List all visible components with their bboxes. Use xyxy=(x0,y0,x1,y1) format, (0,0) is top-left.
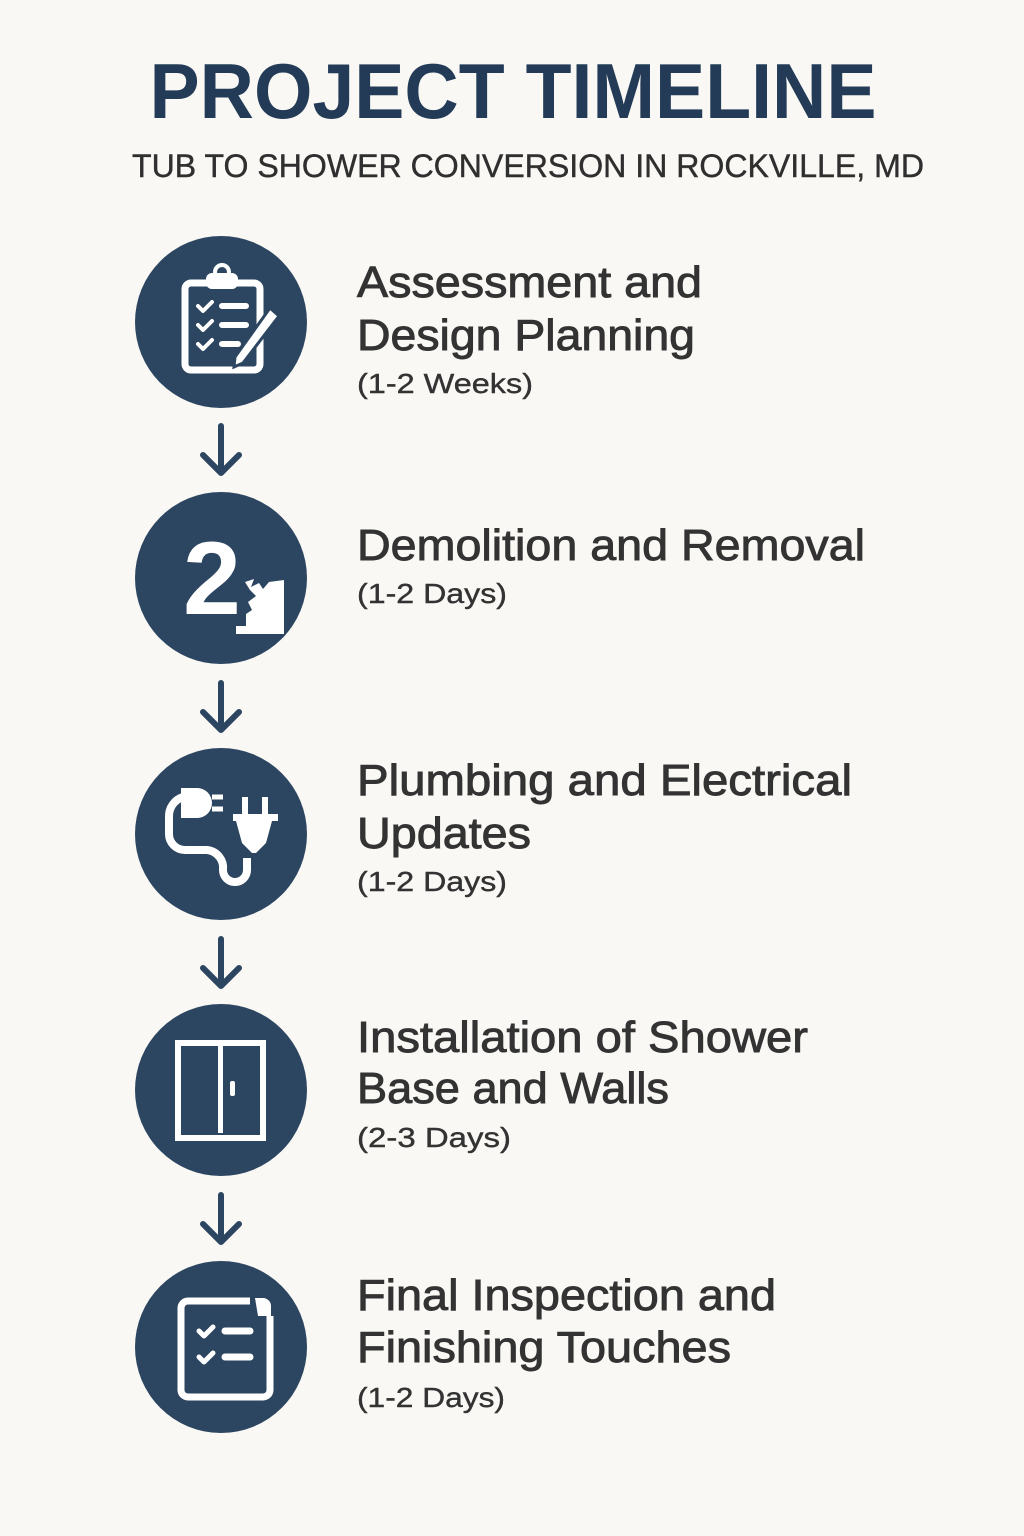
icon: plug xyxy=(135,748,307,920)
heading 1: Assessment and xyxy=(357,258,702,307)
icon: shower door xyxy=(135,1004,307,1176)
step 3: plumbing xyxy=(135,748,852,920)
subtitle: TUB TO SHOWER CONVERSION IN ROCKVILLE, MD xyxy=(132,148,924,184)
arrow 1 xyxy=(203,426,239,473)
heading 3: Plumbing and Electrical xyxy=(357,756,852,805)
duration 5: (1-2 Days) xyxy=(357,1382,505,1413)
title: PROJECT TIMELINE xyxy=(150,47,876,135)
icon: checklist xyxy=(135,1261,307,1433)
icon: number 2 with broken wall: 2 xyxy=(183,521,241,637)
heading 4: Installation of Shower xyxy=(357,1013,808,1062)
duration 3: (1-2 Days) xyxy=(357,866,507,897)
duration 1: (1-2 Weeks) xyxy=(357,368,533,399)
heading 2: Demolition and Removal xyxy=(357,521,865,570)
step 1: assessment: Design Planning xyxy=(357,311,695,360)
step 1: assessment xyxy=(135,236,702,408)
duration 2: (1-2 Days) xyxy=(357,578,507,609)
step 5: final inspection: Finishing Touches xyxy=(357,1323,731,1372)
heading 5: Final Inspection and xyxy=(357,1271,776,1320)
icon: number 2 with broken wall xyxy=(135,492,307,664)
duration 4: (2-3 Days) xyxy=(357,1122,511,1153)
step 2: demolition xyxy=(135,492,865,664)
step 4: installation: Base and Walls xyxy=(357,1064,669,1113)
step 5: final inspection xyxy=(135,1261,776,1433)
step 4: installation xyxy=(135,1004,808,1176)
step 3: plumbing: Updates xyxy=(357,809,531,858)
arrow 2 xyxy=(203,683,239,730)
icon: clipboard xyxy=(135,236,307,408)
arrow 3 xyxy=(203,939,239,986)
arrow 4 xyxy=(203,1195,239,1242)
